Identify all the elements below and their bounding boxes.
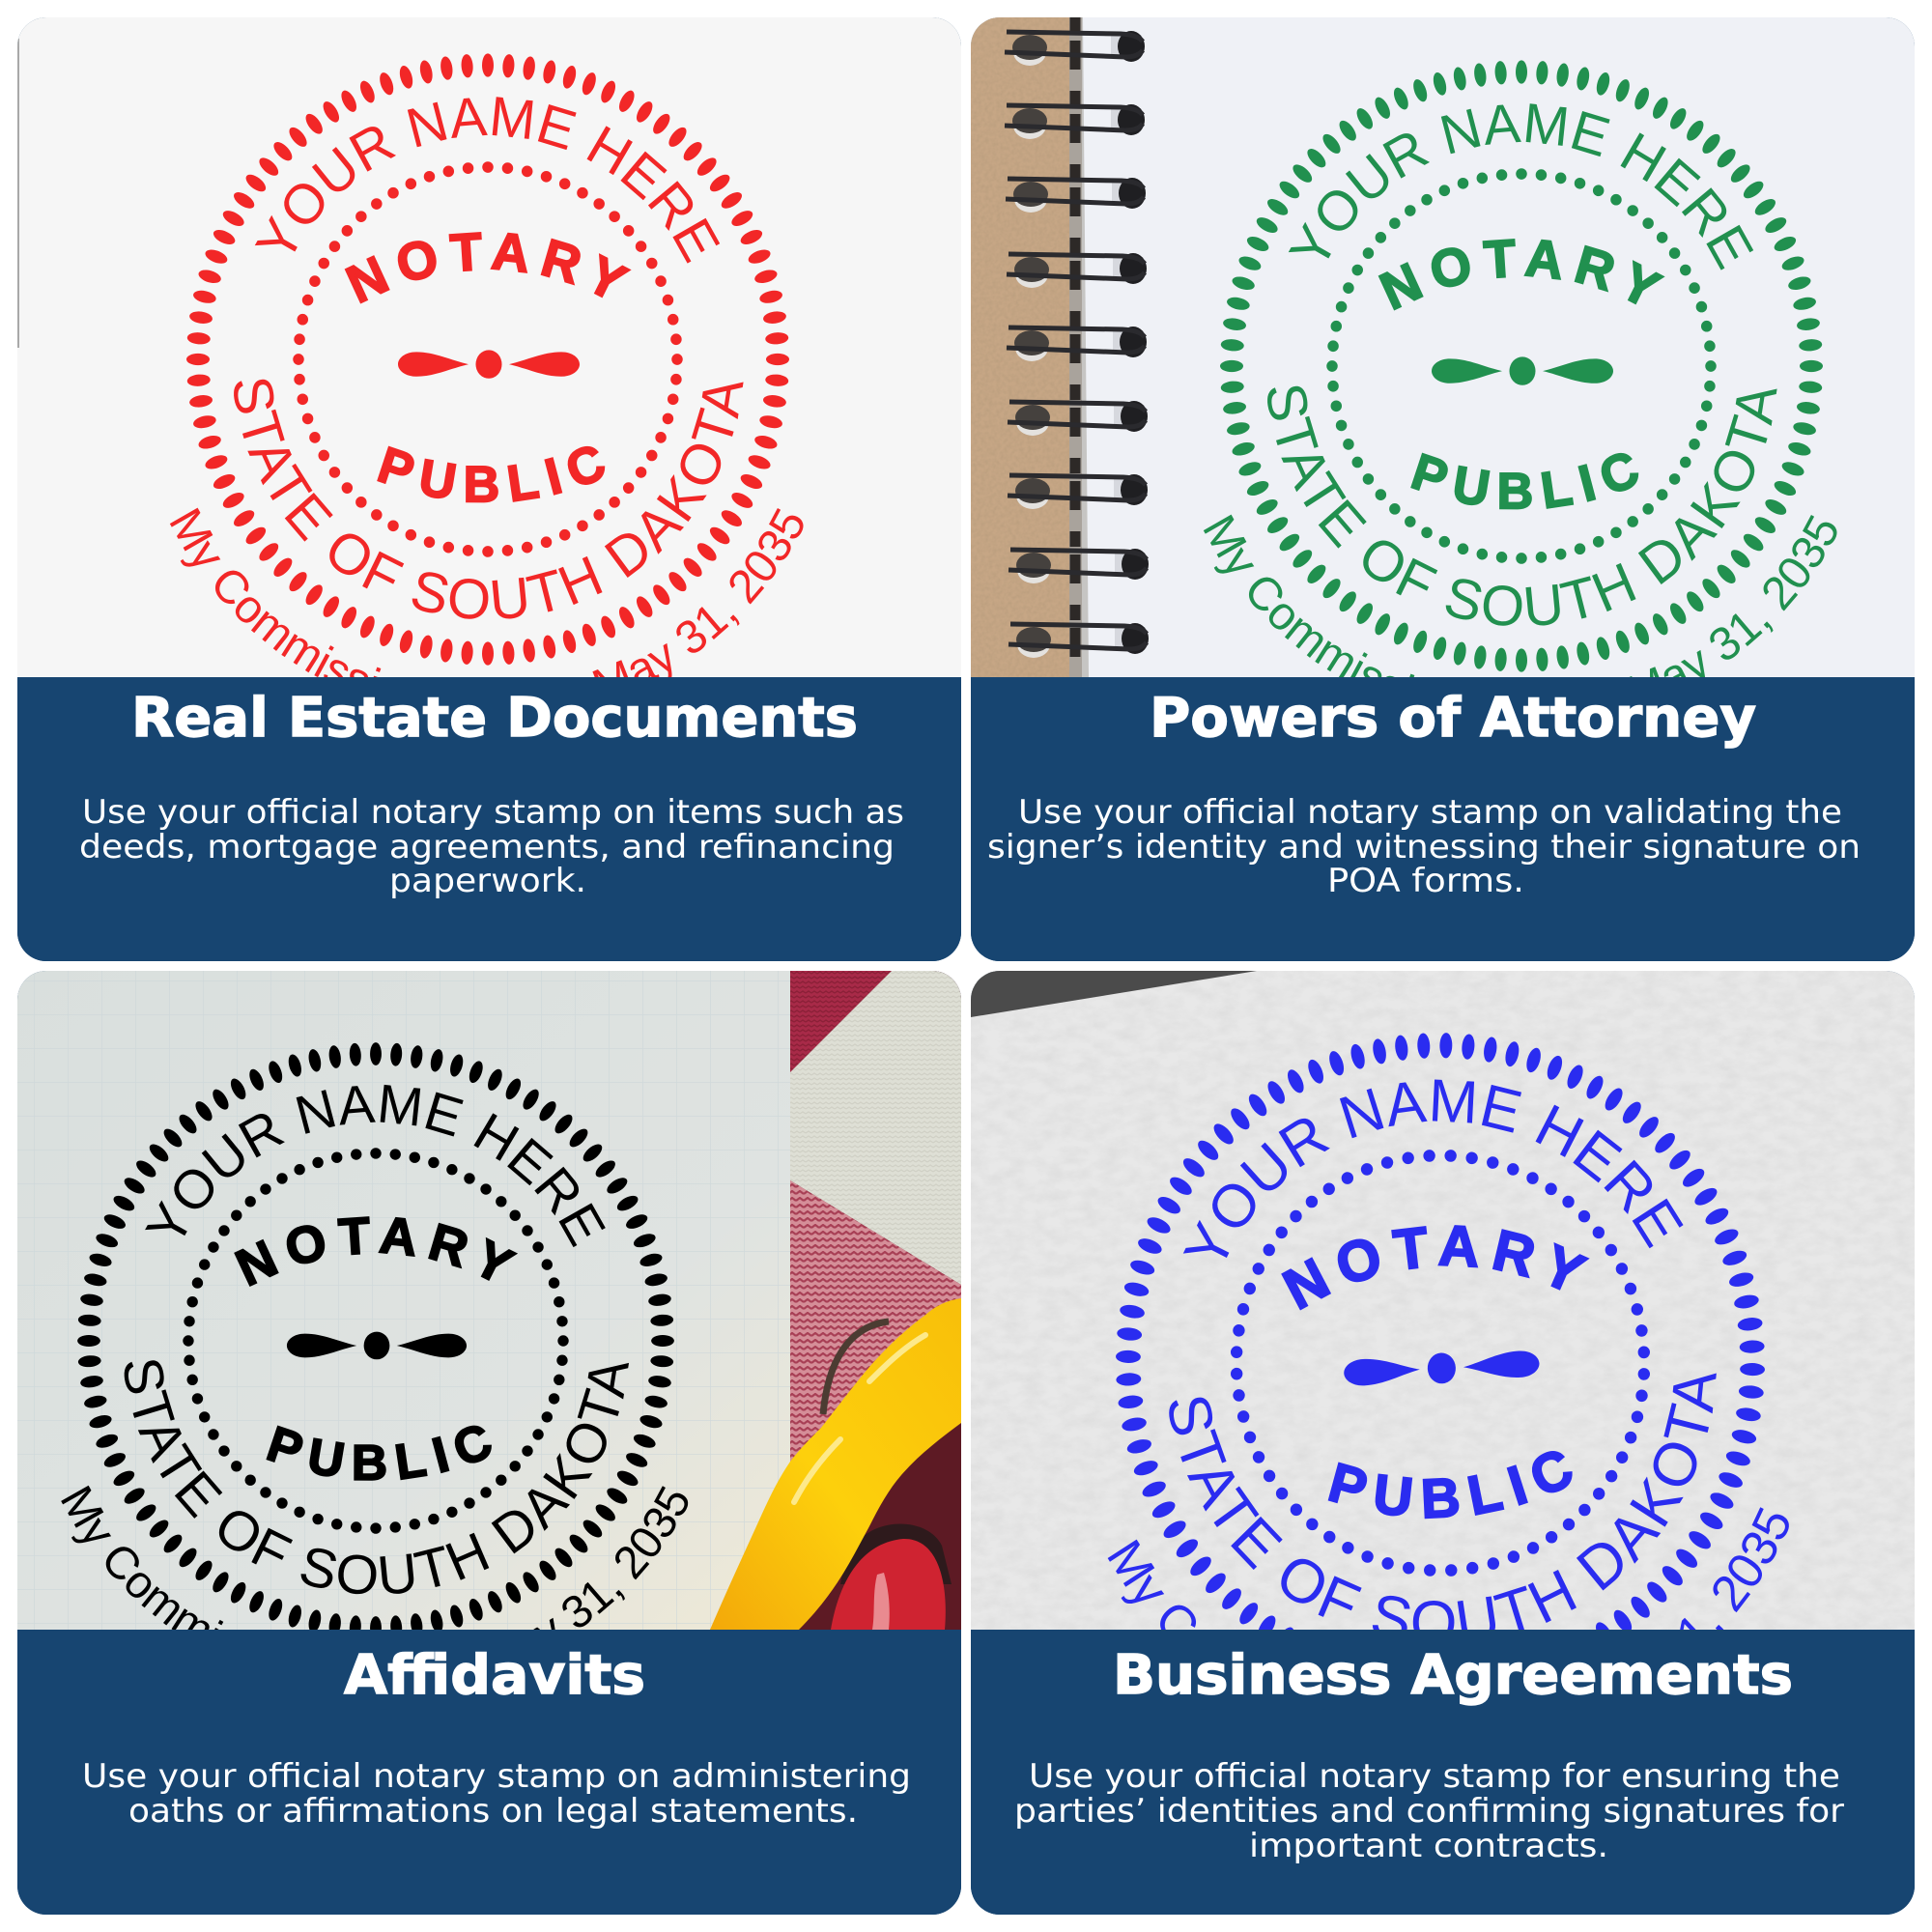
spiral binding [1005,31,1149,658]
red notary stamp: PUBLIC [377,446,605,502]
photo: green notary stamp on spiral notebook [971,17,1915,677]
caption: Business Agreements [971,1630,1915,1915]
green notary stamp: NOTARY [1378,239,1665,311]
red notary stamp: NOTARY [344,232,632,303]
description: paperwork. [389,862,586,900]
description: signer’s identity and witnessing their signature on [987,828,1861,867]
blue notary stamp: PUBLIC [1327,1451,1573,1519]
caption: Affidavits [17,1630,961,1915]
panel: Affidavits [17,971,961,1915]
caption: Powers of Attorney [971,677,1915,961]
description: Use your official notary stamp for ensuring the [1029,1757,1840,1796]
black notary stamp: YOUR NAME HERE [145,1084,606,1248]
description: POA forms. [1327,862,1524,900]
heading: Real Estate Documents [131,687,858,750]
photo: black notary stamp on grid paper beside peppers [17,971,961,1630]
description: oaths or affirmations on legal statements. [128,1792,858,1831]
panel: Powers of Attorney [971,17,1915,961]
green notary stamp [1204,60,1837,677]
green notary stamp: PUBLIC [1410,452,1638,510]
description: important contracts. [1249,1827,1608,1865]
green notary stamp: YOUR NAME HERE [1289,103,1754,270]
description: parties’ identities and confirming signatures for [1014,1792,1844,1831]
heading: Business Agreements [1113,1644,1793,1707]
black notary stamp: STATE OF SOUTH DAKOTA [124,1360,629,1594]
heading: Powers of Attorney [1150,687,1756,750]
panel: Real Estate Documents [17,17,961,961]
panel: Business Agreements [971,971,1915,1915]
description: deeds, mortgage agreements, and refinancing [79,828,895,867]
pepper stem [823,1321,889,1414]
red notary stamp [170,53,804,677]
description: Use your official notary stamp on items such as [82,793,904,832]
description: Use your official notary stamp on validating the [1018,793,1842,832]
description [79,793,904,900]
yellow pepper [710,1298,961,1630]
description [987,793,1861,900]
black notary stamp: NOTARY [234,1216,518,1287]
blue notary stamp: YOUR NAME HERE [1182,1080,1683,1258]
description [82,1757,911,1831]
fabric [790,971,961,1630]
heading: Affidavits [344,1644,645,1707]
caption: Real Estate Documents [17,677,961,961]
description [1014,1757,1844,1865]
green notary stamp: STATE OF SOUTH DAKOTA [1267,386,1777,626]
red chili [831,1524,952,1630]
black notary stamp: PUBLIC [266,1426,492,1481]
blue notary stamp [1107,1033,1789,1630]
blue notary stamp: NOTARY [1281,1225,1590,1310]
red notary stamp: STATE OF SOUTH DAKOTA [234,379,744,619]
description: Use your official notary stamp on administering [82,1757,911,1796]
black notary stamp [61,1042,688,1630]
photo: blue notary stamp on textured paper [971,971,1915,1630]
red notary stamp: YOUR NAME HERE [255,97,721,264]
photo: red notary stamp on white paper [17,17,961,677]
